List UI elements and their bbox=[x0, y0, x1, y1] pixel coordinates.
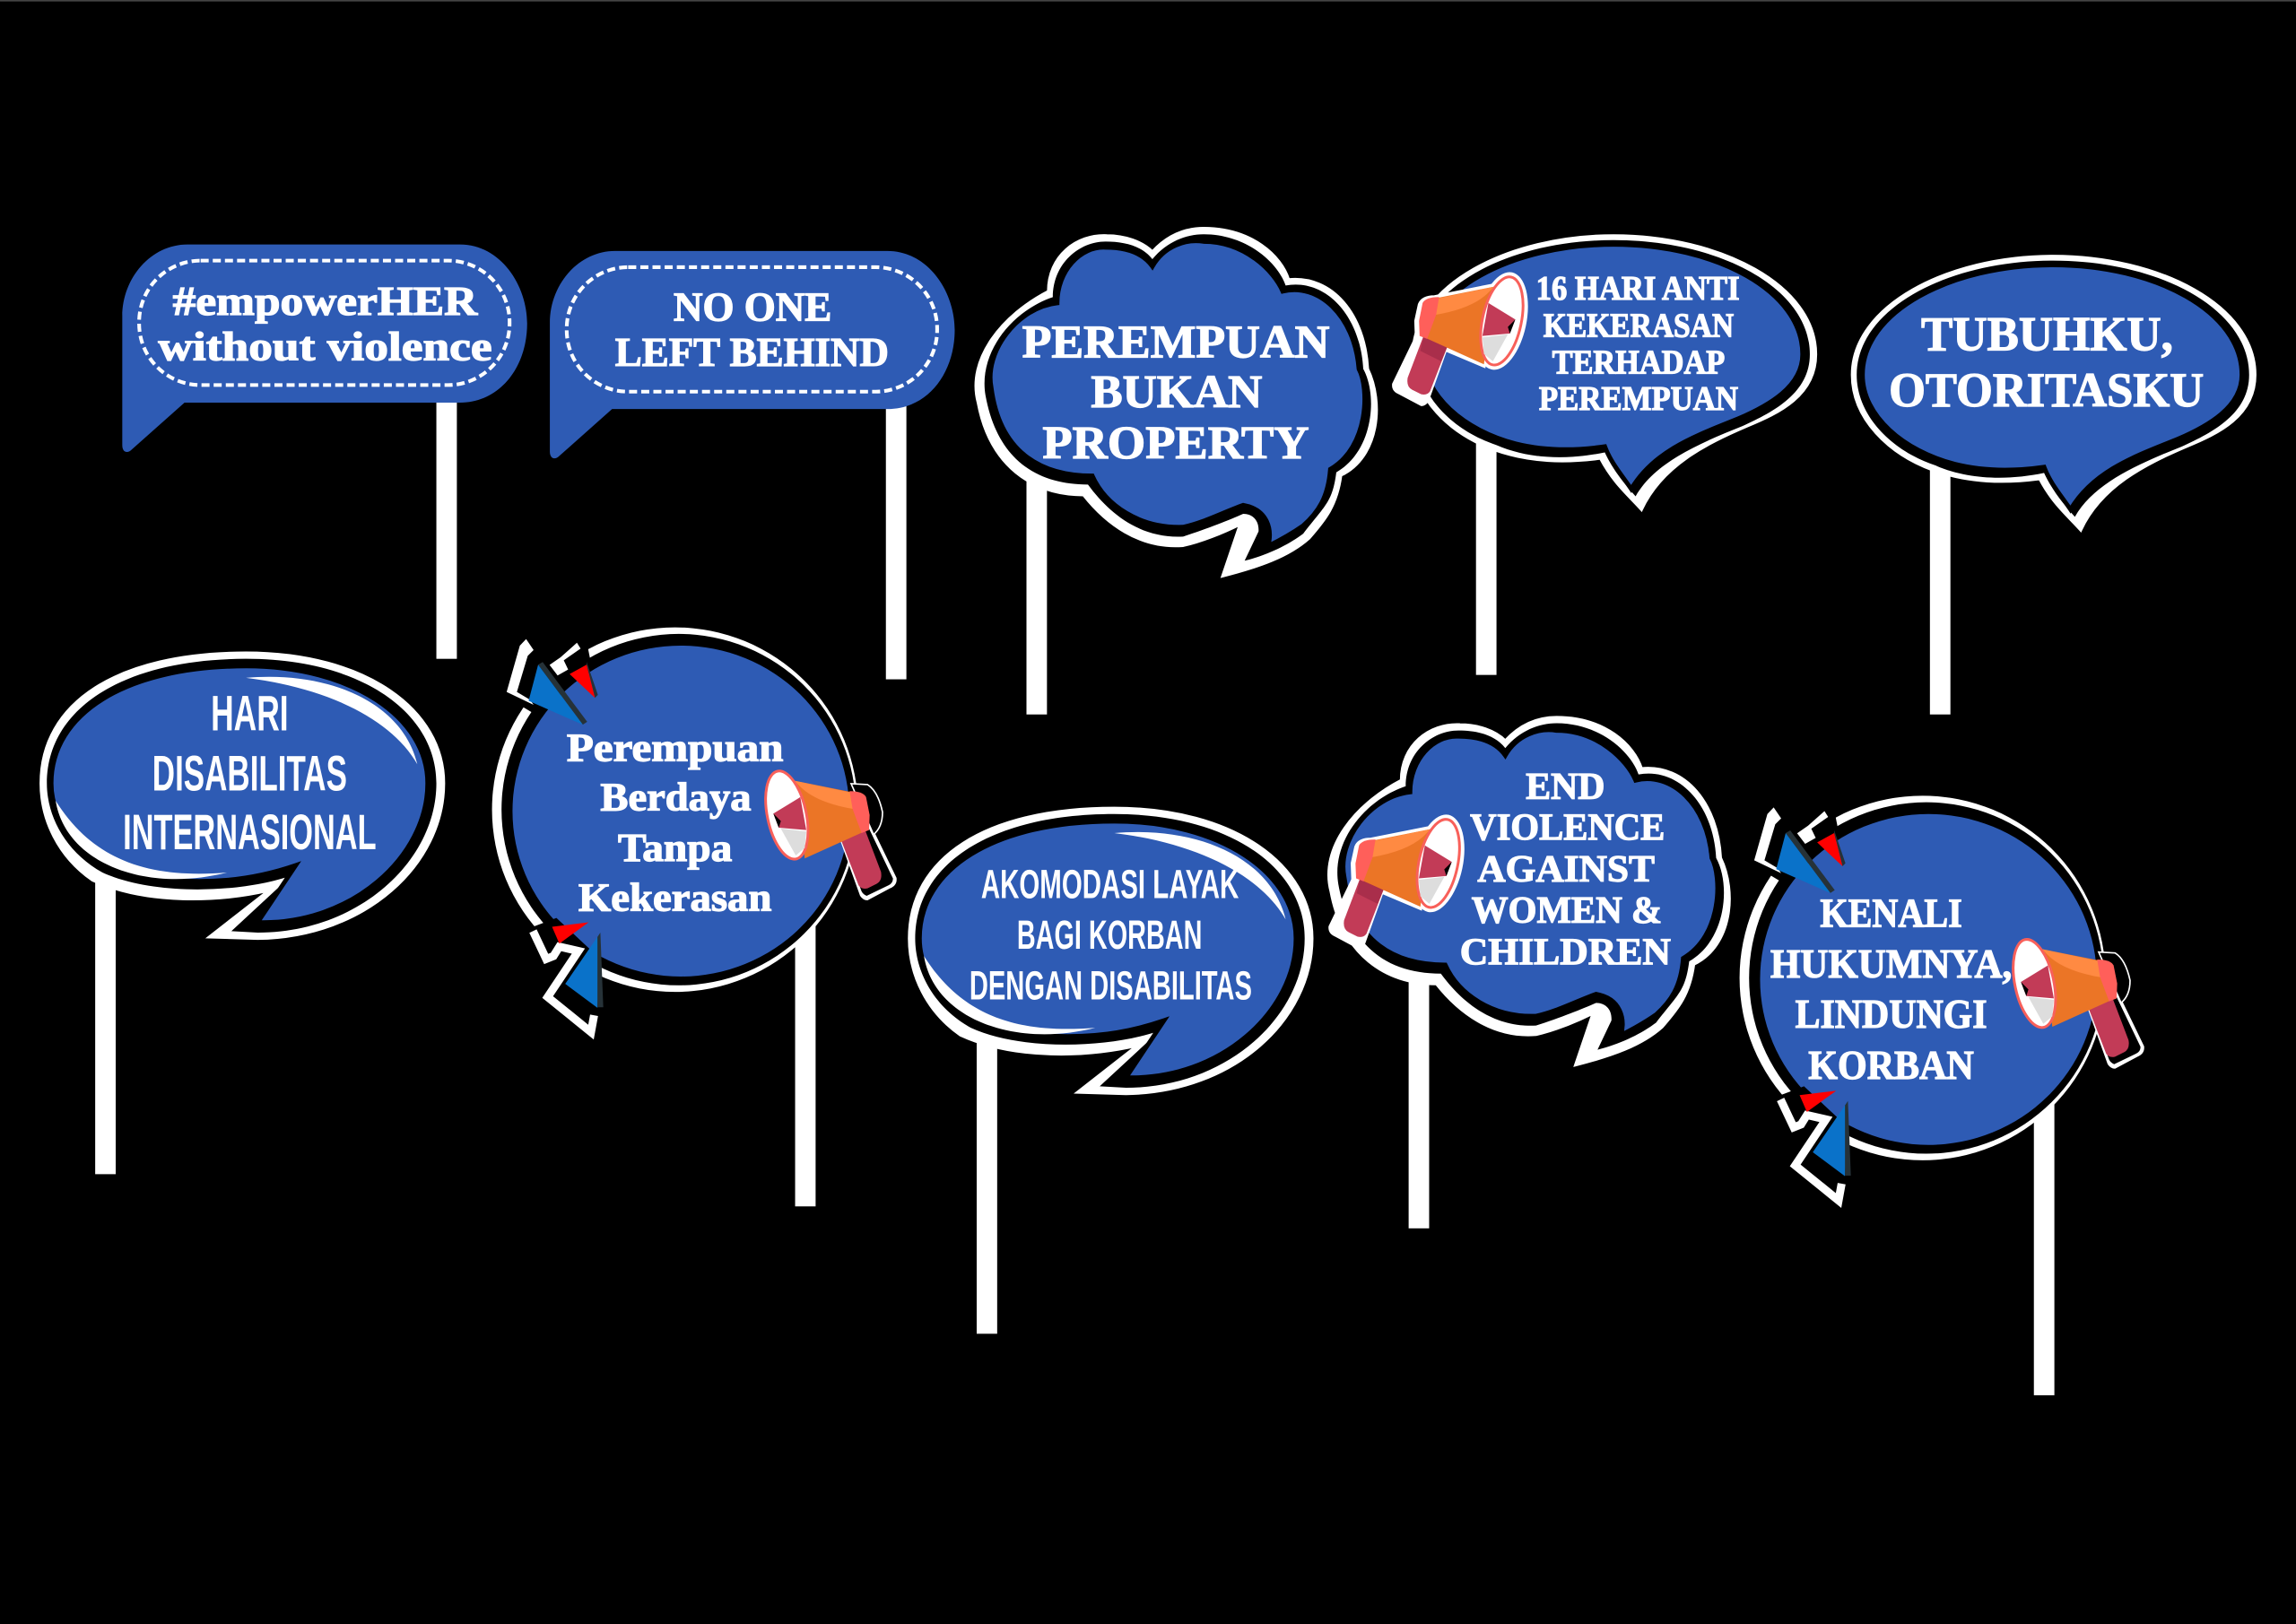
sign: perempuan bukan property: PROPERTY bbox=[1042, 417, 1309, 469]
sign: hari disabilitas internasional bbox=[41, 653, 444, 1174]
icon: burst bottom bbox=[1780, 1086, 1851, 1201]
sign: end violence: AGAINST bbox=[1477, 848, 1655, 890]
sign: 16 hari anti kekerasan: TERHADAP bbox=[1552, 344, 1725, 381]
sign: tubuhku otoritasku: TUBUHKU, bbox=[1921, 308, 2173, 361]
sign: end violence: END bbox=[1526, 766, 1605, 808]
icon: burst top bbox=[1752, 803, 1846, 893]
sign: no one left behind: NO ONE bbox=[674, 284, 831, 330]
sign: akomodasi layak: DENGAN DISABILITAS bbox=[970, 962, 1252, 1008]
sign: no one left behind: LEFT BEHIND bbox=[615, 329, 889, 375]
sign: end violence: CHILDREN bbox=[1460, 932, 1671, 974]
sign: 16 hari anti kekerasan bbox=[1392, 236, 1815, 675]
sign: no one left behind bbox=[550, 251, 954, 680]
sign: perempuan berdaya tanpa kekerasan bbox=[492, 628, 897, 1206]
sign: perempuan berdaya tanpa kekerasan: Kekerasan bbox=[578, 875, 771, 919]
sign: empowerHER bbox=[122, 245, 527, 659]
icon: burst bottom bbox=[533, 918, 604, 1032]
sign: kenali hukumnya: KORBAN bbox=[1808, 1042, 1974, 1088]
sign: perempuan berdaya tanpa kekerasan: Berdaya bbox=[600, 775, 752, 819]
sign: empowerHER: without violence bbox=[158, 324, 492, 369]
icon: burst top bbox=[504, 634, 598, 725]
sign: akomodasi layak: AKOMODASI LAYAK bbox=[981, 862, 1239, 908]
sign: perempuan bukan property: BUKAN bbox=[1091, 366, 1263, 418]
sign: akomodasi layak bbox=[909, 808, 1312, 1333]
sign: tubuhku otoritasku: OTORITASKU bbox=[1889, 363, 2204, 417]
sign: hari disabilitas internasional: HARI bbox=[211, 686, 289, 742]
sign: tubuhku otoritasku bbox=[1852, 256, 2255, 715]
sign: empowerHER: #empowerHER bbox=[173, 278, 478, 324]
sign: end violence bbox=[1328, 717, 1729, 1229]
sign: end violence: VIOLENCE bbox=[1470, 807, 1665, 849]
sign: kenali hukumnya: KENALI bbox=[1820, 890, 1962, 935]
sign: kenali hukumnya: LINDUNGI bbox=[1796, 991, 1987, 1037]
sign: kenali hukumnya: HUKUMNYA, bbox=[1770, 941, 2012, 986]
sign: perempuan bukan property: PEREMPUAN bbox=[1022, 316, 1330, 368]
sign: 16 hari anti kekerasan: 16 HARI ANTI bbox=[1536, 271, 1740, 308]
sign: end violence: WOMEN & bbox=[1472, 890, 1662, 932]
icon: megaphone bbox=[1392, 267, 1536, 406]
sign: akomodasi layak: BAGI KORBAN bbox=[1017, 912, 1202, 958]
sign: 16 hari anti kekerasan: PEREMPUAN bbox=[1539, 381, 1738, 418]
icon: megaphone bbox=[2006, 935, 2144, 1069]
sign: hari disabilitas internasional: DISABILITAS bbox=[152, 746, 347, 802]
sign: kenali hukumnya bbox=[1740, 795, 2144, 1395]
sign: perempuan berdaya tanpa kekerasan: Perempuan bbox=[567, 725, 783, 769]
icon: megaphone bbox=[759, 768, 897, 900]
sign: 16 hari anti kekerasan: KEKERASAN bbox=[1544, 308, 1734, 345]
sign: perempuan bukan property bbox=[976, 229, 1377, 715]
icon: megaphone bbox=[1328, 810, 1473, 949]
sign: perempuan berdaya tanpa kekerasan: Tanpa bbox=[618, 826, 732, 870]
sign: hari disabilitas internasional: INTERNASIONAL bbox=[123, 804, 377, 860]
